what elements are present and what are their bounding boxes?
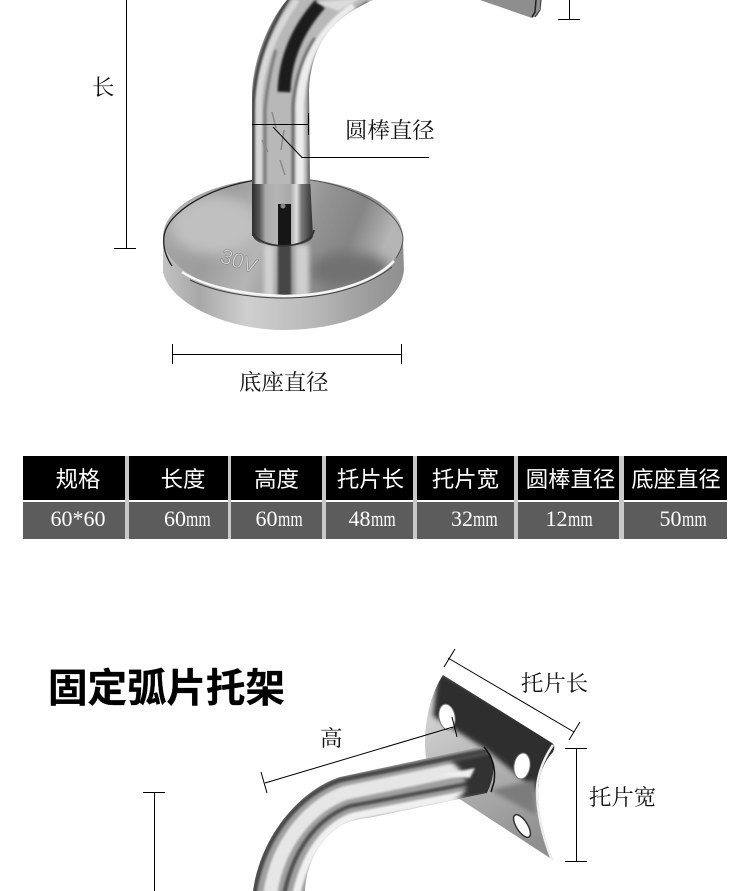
label: plate length: 托片长 (521, 671, 588, 696)
dimension: lower length line (143, 792, 165, 891)
mounting holes (437, 703, 534, 840)
base engraving: 30V (217, 245, 260, 278)
label: rod diameter: 圆棒直径 (345, 118, 435, 143)
dimension: plate length (444, 649, 580, 740)
spec table: 32 (451, 506, 473, 531)
rod collar (253, 230, 314, 246)
arc plate bracket (250, 670, 560, 891)
bracket rod (250, 740, 500, 891)
spec table: 长度 (161, 467, 205, 492)
dimension: length line (114, 0, 136, 248)
dimension: plate width (565, 748, 587, 862)
dimension: rod diameter leader (252, 113, 429, 158)
label: plate width: 托片宽 (589, 785, 656, 810)
spec table: mm (370, 506, 395, 531)
label: base diameter: 底座直径 (239, 370, 329, 395)
spec table: 60 (256, 506, 278, 531)
spec table: 60 (164, 506, 186, 531)
spec table: 托片长 (337, 467, 404, 492)
spec table: mm (186, 506, 211, 531)
label: height: 高 (320, 726, 342, 751)
spec table: 圆棒直径 (526, 467, 615, 492)
label: length: 长 (92, 75, 114, 100)
title: 固定弧片托架 (48, 667, 285, 711)
round base disc (163, 178, 404, 330)
curved steel rod (250, 0, 380, 250)
arc plate (425, 675, 554, 860)
spec table: mm (682, 506, 706, 531)
top bracket plate fragment (480, 0, 541, 18)
spec table: 60*60 (50, 506, 106, 531)
spec table: 规格 (56, 467, 100, 492)
spec table: mm (568, 506, 592, 531)
spec table: 12 (546, 506, 568, 531)
dimension: bracket height (261, 717, 457, 793)
spec table: 底座直径 (631, 467, 721, 492)
spec table: 高度 (254, 467, 299, 492)
spec table: 48 (348, 506, 370, 531)
spec table: 50 (660, 506, 682, 531)
dimension: bracket height tick top right (558, 0, 580, 20)
spec table: mm (278, 506, 302, 531)
spec table: 托片宽 (432, 467, 499, 492)
dimension: base diameter (172, 344, 402, 364)
spec table: mm (473, 506, 498, 531)
